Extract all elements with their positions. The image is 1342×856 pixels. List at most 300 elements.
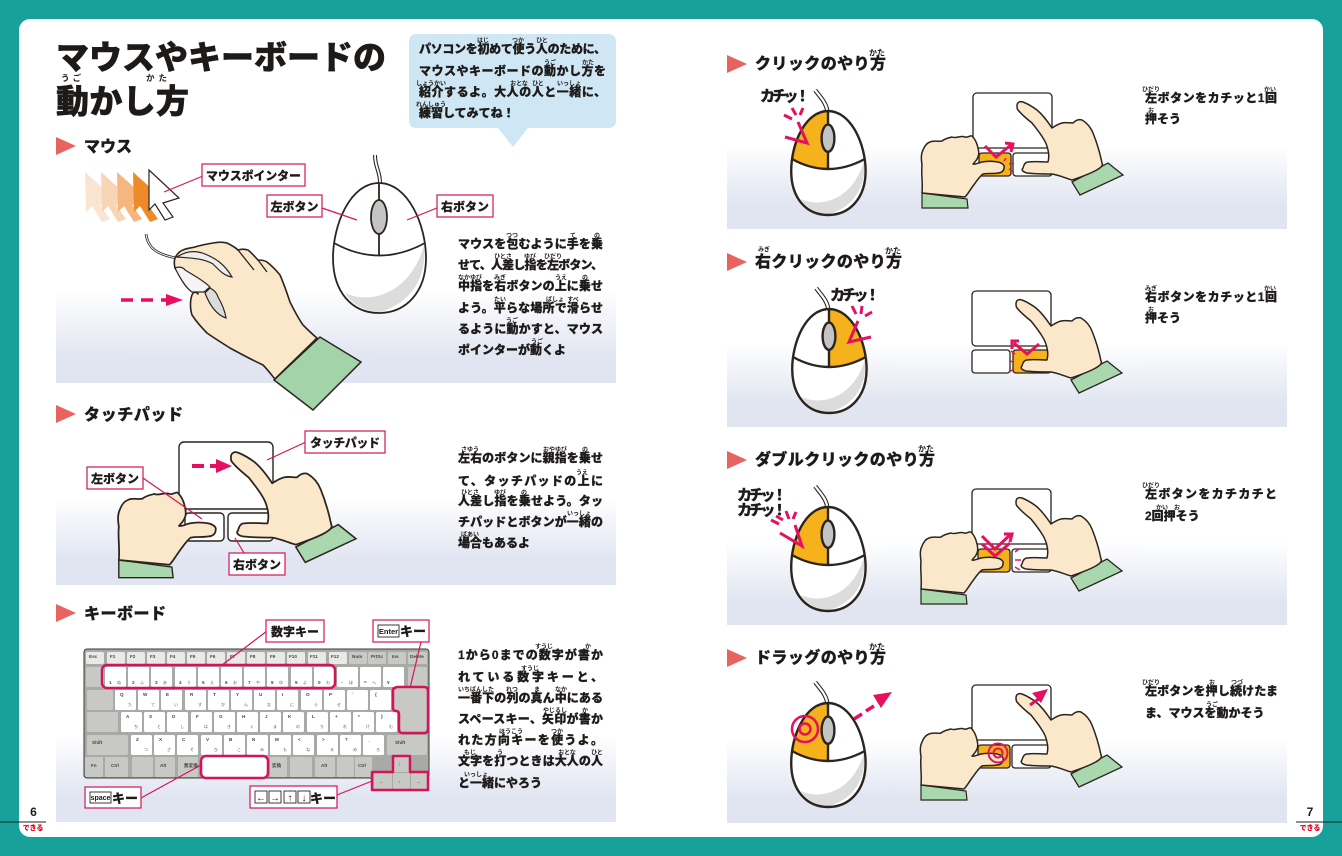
keyboard illustration: れ (343, 723, 347, 729)
callout bubble: 紹介するよ。大人の人と一緒に、 (419, 84, 606, 99)
keyboard illustration: し (180, 724, 184, 729)
keyboard illustration: ` (352, 692, 354, 697)
mouse: right click (792, 288, 872, 413)
heading: touchpad: タッチパッド (84, 406, 183, 424)
mouse instructions: ゆび (524, 252, 536, 260)
keyboard illustration: も (283, 747, 287, 752)
callout bubble: つか (512, 38, 524, 44)
touchpad instructions (458, 446, 603, 550)
keyboard illustration: E (166, 692, 169, 697)
keyboard illustration: い (174, 702, 178, 707)
keyboard illustration: へ (372, 680, 376, 685)
keyboard illustration: あ (163, 680, 167, 685)
keyboard illustration: S (149, 714, 152, 719)
heading: touchpad (56, 405, 183, 424)
keyboard illustration: み (260, 746, 264, 752)
double click instructions: お (1174, 504, 1180, 512)
right click instructions: 右ボタンをカチッと1回 (1145, 289, 1277, 304)
keyboard instructions: と一緒にやろう (458, 775, 542, 790)
keyboard illustration: ろ (376, 746, 380, 752)
keyboard instructions: いちばんした (458, 686, 494, 694)
keyboard instructions: すうじ (535, 642, 553, 650)
sound text: カチッ！ (737, 502, 787, 519)
keyboard illustration: 8 (271, 680, 274, 685)
keyboard illustration: 変換 (272, 762, 282, 769)
callout bubble: はじ (477, 38, 489, 44)
keyboard illustration: お (233, 679, 237, 685)
right click instructions: お (1148, 306, 1154, 314)
label: arrow keys: → (270, 793, 280, 804)
keyboard illustration: F12 (331, 654, 339, 659)
mouse instructions: たい (494, 296, 506, 304)
keyboard illustration: の (296, 724, 300, 729)
keyboard illustration: Ctrl (358, 763, 366, 768)
label: left button: 左ボタン (91, 471, 139, 486)
touchpad instructions: ゆび (494, 488, 506, 496)
drag instructions (1142, 678, 1278, 720)
keyboard illustration: F5 (190, 654, 196, 659)
keyboard instructions: おとな (558, 748, 576, 756)
mouse instructions: るように動かすと、マウス (458, 321, 603, 336)
callout bubble: れんしゅう (416, 100, 446, 108)
mouse instructions: うご (506, 316, 518, 324)
keyboard illustration: ぬ (117, 680, 121, 685)
heading: click: クリックのやり方 (755, 54, 886, 73)
keyboard illustration: F11 (310, 654, 318, 659)
label: right button: 右ボタン (233, 557, 281, 572)
keyboard instructions: やじるし (543, 706, 567, 714)
heading: mouse: マウス (84, 138, 132, 156)
drag band background (727, 739, 1287, 823)
sound text: カチッ！ (760, 88, 810, 105)
keyboard illustration: Alt (160, 763, 167, 768)
keyboard illustration: F7 (230, 654, 236, 659)
keyboard illustration: F8 (250, 654, 256, 659)
label: space key: space (91, 795, 111, 802)
keyboard instructions: か (582, 708, 588, 714)
keyboard illustration: ¥ (387, 680, 390, 685)
drag instructions: 左ボタンを押し続けたま (1145, 683, 1278, 698)
highlight: enter key (393, 687, 428, 733)
keyboard instructions: れた方向キーを使うよ。 (458, 732, 603, 747)
keyboard instructions: ほうこう (499, 728, 523, 736)
double click instructions: かい (1156, 504, 1168, 512)
panel: mouse (56, 137, 616, 410)
touchpad instructions: 左右のボタンに親指を乗せ (458, 450, 603, 465)
mouse: double click (771, 486, 866, 611)
keyboard illustration: J (265, 714, 268, 719)
keyboard illustration: Num (352, 654, 362, 659)
sound text: カチッ！ (830, 287, 880, 304)
heading: double click (727, 444, 935, 469)
page number right (1296, 805, 1342, 832)
double click instructions (1142, 482, 1277, 523)
panel: right click (727, 246, 1287, 427)
label: number keys (222, 620, 324, 665)
keyboard illustration: ほ (349, 679, 353, 685)
touchpad: right click (972, 291, 1122, 393)
keyboard illustration: V (206, 737, 210, 742)
keyboard illustration (84, 649, 429, 790)
label: touchpad (267, 431, 385, 460)
keyboard illustration: 2 (132, 680, 135, 685)
keyboard illustration: < (298, 737, 301, 742)
touchpad instructions: の (521, 490, 527, 496)
touchpad instructions: 場合もあるよ (458, 535, 530, 550)
keyboard illustration: ま (273, 724, 277, 729)
label: arrow keys: キー (310, 791, 336, 806)
keyboard illustration: F9 (270, 654, 276, 659)
touchpad instructions: おやゆび (543, 446, 567, 454)
right click instructions (1145, 284, 1277, 325)
keyboard illustration: R (190, 692, 194, 697)
keyboard illustration: な (267, 701, 271, 707)
heading: drag: かた (869, 642, 885, 652)
keyboard illustration: Ctrl (111, 763, 119, 768)
keyboard illustration: _ (367, 737, 371, 742)
callout bubble: マウスやキーボードの動かし方を (419, 63, 606, 78)
right click band background (727, 343, 1287, 427)
keyboard illustration: Delete (410, 654, 424, 659)
touchpad: left click (921, 93, 1123, 208)
callout bubble (409, 34, 616, 147)
main title: 動かし方 (56, 83, 189, 120)
keyboard illustration: せ (337, 702, 341, 707)
keyboard instructions: ひと (591, 750, 603, 756)
label: enter key: キー (400, 624, 426, 639)
keyboard illustration: X (159, 737, 163, 742)
keyboard instructions: 1から0までの数字が書か (458, 647, 603, 662)
large mouse diagram (333, 155, 426, 313)
label: arrow keys: ↑ (288, 793, 292, 804)
heading: drag (727, 642, 886, 667)
touchpad instructions: いっしょ (567, 510, 591, 518)
highlight: number keys (102, 665, 335, 688)
heading: keyboard (56, 604, 166, 623)
right click instructions: みぎ (1145, 284, 1157, 292)
keyboard illustration: F1 (110, 654, 116, 659)
page number left (0, 805, 46, 832)
keyboard illustration: た (128, 701, 132, 707)
main title: マウスやキーボードの (56, 39, 386, 76)
keyboard illustration: → (416, 779, 421, 784)
keyboard illustration: ↓ (398, 779, 400, 784)
mouse instructions: ポインターが動くよ (458, 342, 566, 357)
click instructions: 左ボタンをカチッと1回 (1145, 90, 1277, 105)
keyboard illustration: > (322, 737, 325, 742)
keyboard instructions: れている数字キーと、 (458, 669, 603, 684)
keyboard instructions (458, 642, 603, 790)
keyboard illustration: か (221, 701, 225, 707)
keyboard illustration: す (198, 702, 202, 707)
keyboard instructions: いっしょ (464, 772, 488, 778)
keyboard illustration: わ (326, 679, 330, 685)
touchpad instructions: ひとさ (461, 490, 479, 496)
label: arrow keys: ← (256, 793, 266, 804)
keyboard illustration: 7 (248, 680, 251, 685)
keyboard illustration: ち (134, 723, 138, 729)
heading: drag: ドラッグのやり方 (755, 648, 886, 667)
keyboard illustration: B (229, 737, 233, 742)
keyboard illustration: ん (244, 702, 248, 707)
hand on mouse (146, 234, 361, 410)
mouse instructions: すべ (567, 296, 579, 304)
keyboard illustration: ひ (214, 747, 218, 752)
page number left: できる (23, 823, 43, 832)
touchpad: double click (920, 489, 1122, 604)
mouse instructions: ひだり (544, 252, 562, 260)
page number right: 7 (1307, 805, 1314, 819)
keyboard illustration: K (288, 714, 292, 719)
keyboard instructions: う (497, 748, 503, 756)
keyboard band background (56, 735, 616, 822)
keyboard illustration: Shift (92, 740, 103, 745)
mouse instructions: て (570, 232, 576, 240)
keyboard illustration: う (187, 679, 191, 685)
label: right button (407, 195, 493, 220)
keyboard illustration: T (213, 692, 216, 697)
keyboard illustration: め (353, 747, 357, 752)
keyboard illustration: そ (190, 746, 194, 752)
mouse: drag (791, 682, 866, 807)
mouse instructions (458, 232, 603, 357)
double click band background (727, 541, 1287, 625)
keyboard illustration: H (242, 714, 246, 719)
callout bubble: ひと (536, 38, 548, 44)
callout bubble: かた (582, 58, 594, 66)
mouse instructions: の (594, 232, 600, 240)
mouse instructions: 中指を右ボタンの上に乗せ (458, 278, 603, 293)
keyboard illustration: A (126, 714, 130, 719)
keyboard illustration: む (389, 723, 393, 729)
keyboard illustration: L (312, 714, 315, 719)
label: space key: キー (112, 791, 138, 806)
keyboard illustration: F (196, 714, 199, 719)
label: mouse pointer (164, 164, 305, 192)
mouse instructions: ばしょ (546, 296, 564, 304)
main title: うご (61, 73, 81, 83)
heading: click (727, 48, 886, 73)
keyboard illustration: 4 (179, 680, 182, 685)
keyboard instructions: 文字を打つときは大人の人 (458, 753, 603, 768)
keyboard illustration: ゆ (279, 679, 283, 685)
touchpad instructions: さゆう (461, 446, 479, 454)
keyboard illustration: G (219, 714, 223, 719)
keyboard illustration: 6 (225, 680, 228, 685)
keyboard illustration: て (151, 702, 155, 707)
keyboard illustration: る (330, 746, 334, 752)
panel: double click (727, 444, 1287, 625)
keyboard illustration: 1 (109, 680, 112, 685)
keyboard illustration: PrtSc (371, 654, 383, 659)
keyboard illustration: 9 (295, 680, 298, 685)
keyboard illustration: I (282, 692, 283, 697)
sound text (737, 487, 787, 519)
double click instructions: 2回押そう (1145, 508, 1200, 523)
keyboard illustration: き (227, 724, 231, 729)
keyboard illustration: さ (167, 746, 171, 752)
click instructions (1142, 86, 1277, 126)
keyboard illustration: は (204, 724, 208, 729)
page number left: 6 (30, 805, 37, 819)
keyboard illustration: * (358, 714, 360, 719)
keyboard illustration: Esc (89, 654, 98, 659)
callout bubble: しょうかい (416, 80, 446, 88)
double click instructions: 左ボタンをカチカチと (1145, 486, 1277, 501)
keyboard illustration: く (250, 724, 254, 729)
keyboard illustration: Alt (321, 763, 328, 768)
keyboard instructions: もじ (464, 750, 476, 756)
arrow: drag direction (854, 692, 892, 719)
mouse instructions: みぎ (494, 274, 506, 282)
touchpad instructions: うえ (576, 468, 588, 476)
click instructions: お (1148, 108, 1154, 114)
highlight: arrow keys (372, 756, 428, 790)
double click instructions: ひだり (1142, 482, 1160, 490)
keyboard illustration: 5 (202, 680, 205, 685)
keyboard illustration: ね (306, 746, 310, 752)
heading: right click (727, 246, 902, 271)
keyboard instructions: スペースキー、矢印が書か (458, 711, 603, 726)
keyboard instructions: ま (534, 686, 540, 694)
mouse instructions: ひとさ (494, 254, 512, 260)
keyboard illustration: Z (136, 737, 139, 742)
label: number keys: 数字キー (271, 624, 319, 639)
label: enter key (373, 620, 429, 688)
keyboard illustration: こ (237, 747, 241, 752)
callout bubble: パソコンを初めて使う人のために、 (419, 41, 606, 56)
keyboard illustration: 3 (155, 680, 158, 685)
keyboard illustration: D (172, 714, 176, 719)
heading: double click: ダブルクリックのやり方 (755, 450, 935, 469)
mouse instructions: よう。平らな場所で滑らせ (458, 300, 603, 315)
label: enter key: Enter (379, 627, 398, 636)
keyboard illustration: え (210, 679, 214, 685)
click band background (727, 145, 1287, 229)
mouse instructions: マウスを包むように手を乗 (458, 236, 603, 251)
touchpad diagram (118, 442, 356, 578)
keyboard illustration: ふ (140, 680, 144, 685)
touchpad instructions: て、タッチパッドの上に (458, 473, 603, 488)
keyboard illustration: P (329, 692, 332, 697)
callout bubble: うご (544, 58, 556, 66)
touchpad instructions: の (582, 446, 588, 454)
keyboard illustration: 0 (318, 680, 321, 685)
keyboard illustration: + (335, 714, 338, 719)
keyboard illustration: ? (345, 737, 348, 742)
heading: click: かた (869, 48, 885, 58)
label: mouse pointer: マウスポインター (206, 168, 301, 183)
keyboard illustration: Y (236, 692, 239, 697)
drag instructions: うご (1206, 700, 1218, 708)
callout bubble: おとな (510, 80, 528, 88)
heading: mouse (56, 137, 132, 156)
touchpad instructions: ばあい (461, 530, 479, 538)
arrow: finger motion (192, 459, 232, 473)
main title (56, 39, 386, 120)
keyboard illustration: や (256, 679, 260, 685)
heading: double click: かた (918, 444, 934, 454)
keyboard illustration: ← (379, 779, 384, 784)
label: left button (87, 467, 202, 519)
drag instructions: つづ (1231, 678, 1243, 686)
keyboard illustration: Ins (392, 654, 399, 659)
callout bubble: いっしょ (557, 80, 581, 88)
touchpad: drag (920, 685, 1122, 800)
mouse band background (56, 290, 616, 383)
right click instructions: かい (1264, 286, 1276, 292)
keyboard illustration: ^ (364, 680, 367, 685)
keyboard illustration: つ (144, 747, 148, 752)
panel: click (727, 48, 1287, 229)
mouse instructions: つつ (506, 234, 518, 240)
click instructions: かい (1264, 86, 1276, 94)
keyboard illustration: Shift (395, 740, 406, 745)
right click instructions: 押そう (1145, 310, 1181, 325)
panel: drag (727, 642, 1287, 823)
label: left button (267, 195, 357, 220)
keyboard illustration: ↑ (398, 762, 400, 767)
label: right button (229, 538, 285, 575)
drag instructions: ひだり (1142, 678, 1160, 686)
keyboard illustration: N (252, 737, 256, 742)
highlight: space key (201, 756, 268, 778)
mouse instructions: なかゆび (458, 274, 482, 282)
keyboard illustration: C (182, 737, 186, 742)
keyboard illustration: W (143, 692, 148, 697)
keyboard illustration: U (259, 692, 263, 697)
panel: keyboard (56, 604, 616, 822)
keyboard illustration: - (341, 680, 343, 685)
drag instructions: お (1209, 680, 1215, 686)
keyboard illustration: { (375, 692, 377, 697)
drag instructions: ま、マウスを動かそう (1145, 705, 1265, 720)
keyboard illustration: よ (303, 680, 307, 685)
label: arrow keys (250, 781, 372, 808)
keyboard illustration: と (157, 724, 161, 729)
heading: right click: みぎ (758, 246, 770, 254)
keyboard illustration: に (290, 702, 294, 707)
click instructions: 押そう (1145, 111, 1181, 126)
mouse instructions: うご (531, 338, 543, 346)
keyboard illustration: F6 (210, 654, 216, 659)
keyboard instructions: つか (551, 728, 563, 736)
keyboard illustration: O (306, 692, 310, 697)
keyboard illustration: Q (120, 692, 124, 697)
label: arrow keys: ↓ (302, 793, 306, 804)
click instructions: ひだり (1142, 86, 1160, 94)
keyboard illustration: Fn (91, 763, 97, 768)
label: touchpad: タッチパッド (310, 435, 380, 450)
keyboard illustration: F3 (150, 654, 156, 659)
main title: かた (146, 73, 167, 83)
panel: touchpad (56, 405, 616, 585)
label: right button: 右ボタン (441, 199, 489, 214)
page number right: できる (1300, 823, 1320, 832)
keyboard instructions: れつ (506, 686, 518, 694)
label: space key (85, 765, 201, 808)
keyboard instructions: 一番下の列の真ん中にある (458, 690, 603, 705)
keyboard illustration: M (275, 737, 279, 742)
heading: right click: 右クリックのやり方 (755, 252, 902, 271)
keyboard illustration: F2 (130, 654, 136, 659)
mouse instructions: の (582, 274, 588, 282)
keyboard instructions: なか (555, 686, 567, 694)
heading: right click: かた (885, 246, 901, 256)
keyboard illustration: け (366, 723, 370, 729)
mouse instructions: せて、人差し指を左ボタン、 (458, 257, 603, 272)
keyboard illustration: 無変換 (184, 762, 198, 769)
